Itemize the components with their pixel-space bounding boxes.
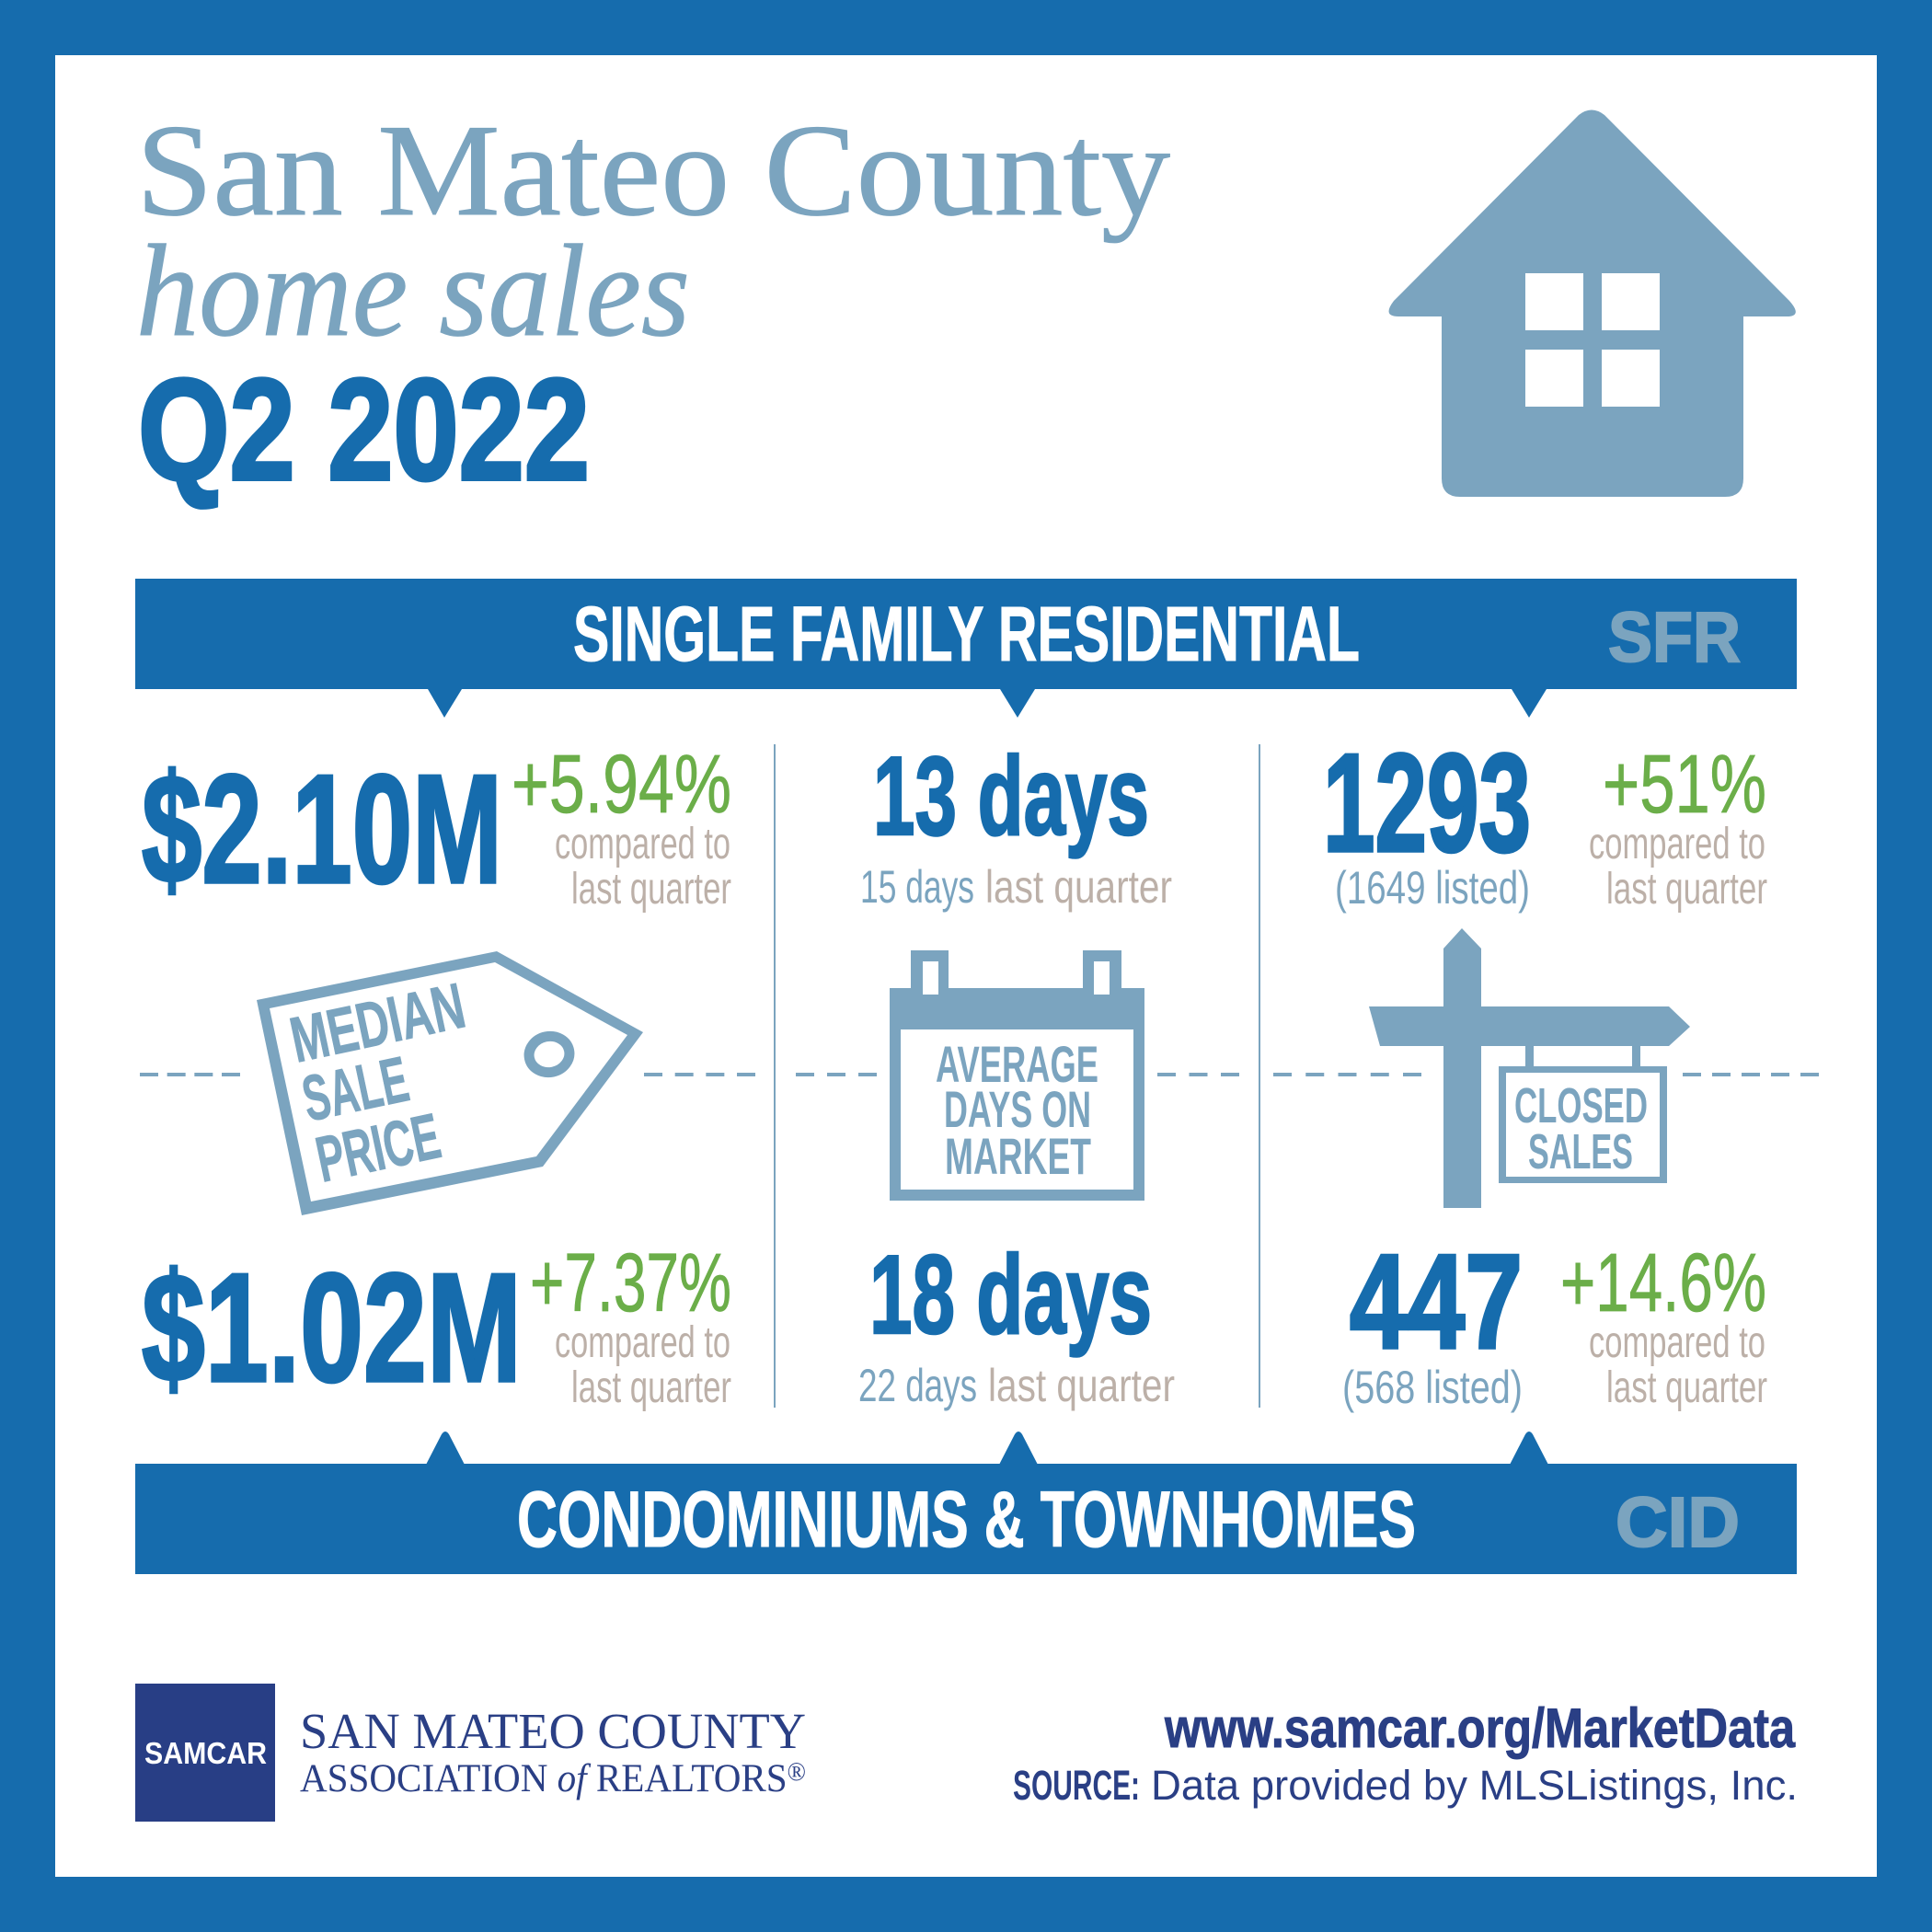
comparison note: [1589, 1318, 1767, 1412]
calendar label: DAYS ON: [944, 1080, 1091, 1138]
title line: home sales: home sales: [136, 218, 690, 363]
calendar label: MARKET: [945, 1127, 1091, 1185]
comparison note: last quarter: [1606, 865, 1767, 914]
tag label: PRICE: [310, 1099, 446, 1196]
icon: price tag: [257, 951, 643, 1215]
banner: single family residential: [135, 579, 1797, 718]
panel: days on market CID stat: [858, 1232, 1175, 1411]
days value: 13 days: [873, 733, 1149, 858]
panel: days on market SFR stat: [860, 733, 1172, 913]
comparison note: compared to: [1589, 1318, 1765, 1367]
days value: 18 days: [869, 1232, 1152, 1357]
price value: $1.02M: [142, 1241, 522, 1414]
banner: condominiums and townhomes: [135, 1432, 1797, 1574]
comparison note: [555, 1318, 731, 1412]
sales value: 1293: [1323, 725, 1531, 881]
previous quarter: last quarter: [985, 861, 1172, 913]
comparison note: last quarter: [571, 865, 731, 914]
sales value: 447: [1350, 1226, 1523, 1376]
website link: www.samcar.org/MarketData: [1164, 1697, 1796, 1759]
previous quarter: 22 days: [858, 1360, 977, 1411]
calendar label: [936, 1035, 1098, 1185]
previous quarter: [860, 861, 1172, 913]
sign label: CLOSED: [1514, 1078, 1648, 1133]
banner heading: CID: CONDOMINIUMS & TOWNHOMES: [517, 1476, 1416, 1564]
tag label: [284, 970, 471, 1196]
logo wordmark: SAMCAR: [144, 1736, 267, 1770]
column dividers and dashed guide: [140, 744, 1819, 1408]
listed count: (1649 listed): [1335, 862, 1530, 914]
organisation name: [300, 1703, 806, 1800]
title line: San Mateo County: San Mateo County: [136, 98, 1170, 243]
comparison note: last quarter: [571, 1363, 731, 1412]
price value: $2.10M: [142, 742, 502, 915]
banner tag: CID: CID: [1616, 1483, 1740, 1562]
previous quarter: 15 days: [860, 861, 974, 913]
tag label: SALE: [296, 1042, 415, 1135]
title line: Q2 2022: Q2 2022: [138, 350, 590, 511]
sign label: [1514, 1078, 1648, 1179]
comparison note: compared to: [555, 1318, 730, 1367]
price change: +5.94%: [512, 739, 731, 831]
title: [136, 98, 1170, 511]
previous quarter: [858, 1360, 1175, 1411]
organisation name: ASSOCIATION of REALTORS: [300, 1757, 797, 1800]
panel: median sale price CID stat: [142, 1237, 731, 1414]
comparison note: last quarter: [1606, 1363, 1767, 1412]
source note: Data provided by MLSListings, Inc.: [1151, 1762, 1798, 1809]
listed count: (568 listed): [1342, 1362, 1523, 1413]
icon: house: [1389, 110, 1796, 497]
calendar label: AVERAGE: [936, 1035, 1098, 1093]
panel: median sale price SFR stat: [142, 739, 731, 915]
banner tag: SFR: SFR: [1608, 598, 1741, 677]
comparison note: [1589, 820, 1767, 914]
organisation name: SAN MATEO COUNTY: [300, 1703, 806, 1759]
tag label: MEDIAN: [284, 970, 471, 1076]
banner heading: SFR: SINGLE FAMILY RESIDENTIAL: [573, 591, 1360, 677]
comparison note: [555, 820, 731, 914]
price change: +7.37%: [530, 1237, 731, 1329]
comparison note: compared to: [1589, 820, 1765, 868]
organisation name: ®: [788, 1758, 806, 1787]
logo: SAMCAR: [135, 1684, 275, 1822]
comparison note: compared to: [555, 820, 730, 868]
previous quarter: last quarter: [988, 1360, 1175, 1411]
icon: hanging sign post: [1369, 928, 1690, 1208]
icon: calendar: [890, 950, 1144, 1201]
sales change: +14.6%: [1560, 1237, 1766, 1329]
panel: closed sales SFR stat: [1323, 725, 1767, 914]
sign label: SALES: [1528, 1124, 1633, 1179]
source note: SOURCE:: [1013, 1762, 1140, 1809]
panel: closed sales CID stat: [1342, 1226, 1767, 1413]
sales change: +51%: [1603, 739, 1766, 831]
